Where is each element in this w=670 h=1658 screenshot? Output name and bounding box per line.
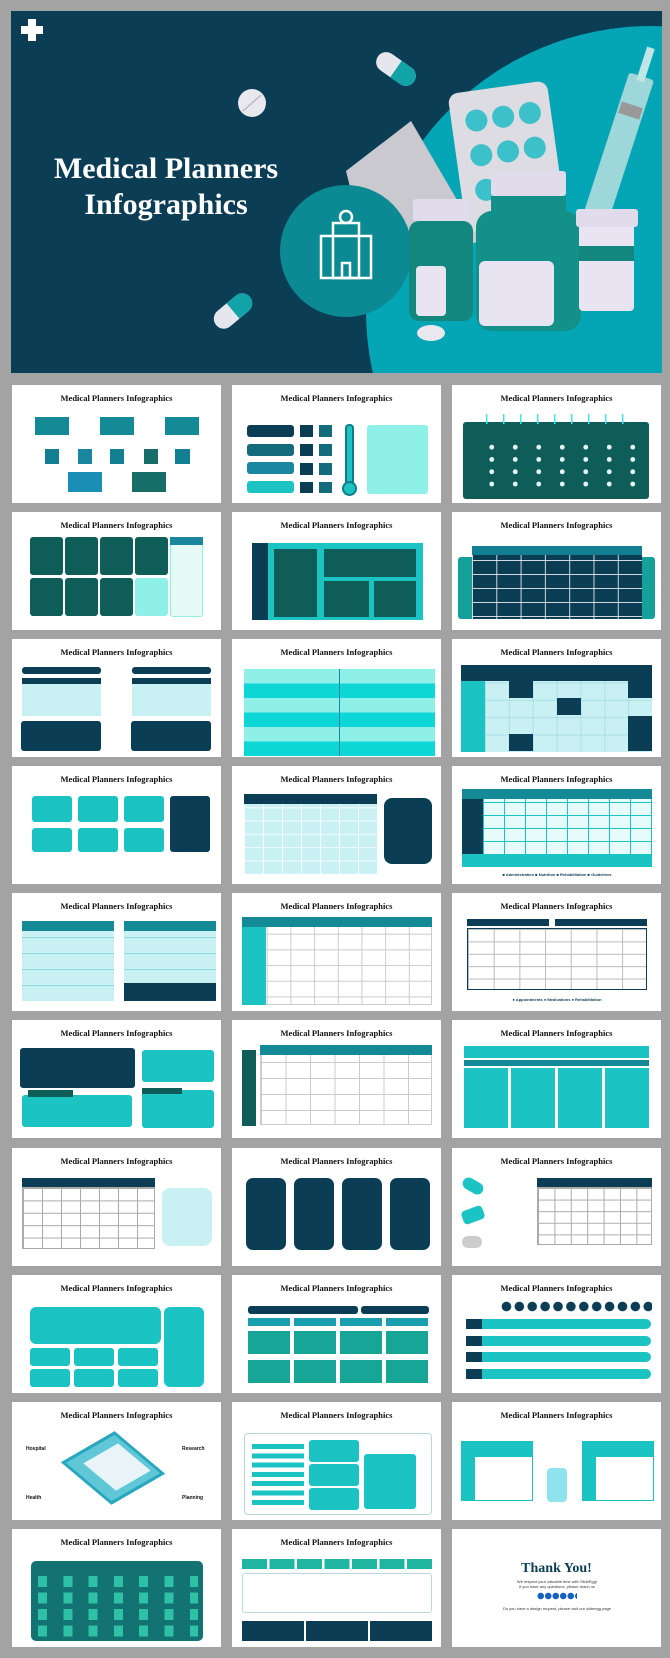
thumb 1: flow chart: Medical Planners Infographics	[61, 393, 172, 403]
thumb 11: calendar + dark note: Medical Planners Infographics	[281, 774, 392, 784]
thumb 13: treatment tables	[12, 893, 221, 1011]
thumb 25: clipboard: Planning	[182, 1495, 203, 1501]
thumb 12: weekly calendar: ■ Administration ■ Nutrition ■ Rehabilitation ■ Guidelines	[502, 872, 612, 877]
thumb 12: weekly calendar: Medical Planners Infographics	[501, 774, 612, 784]
thumb 13: treatment tables: Medical Planners Infographics	[61, 901, 172, 911]
thumb 30: thank you: Thank You!	[521, 1561, 592, 1576]
thumb 30: thank you: If you have any questions, please reach us	[519, 1584, 595, 1589]
thumb 2: thermometer	[232, 385, 441, 503]
thumb 20: four cards	[232, 1148, 441, 1266]
thumb 6: April calendar	[452, 512, 661, 630]
thumb 28: teal grid	[12, 1529, 221, 1647]
thumb 1: flow chart	[12, 385, 221, 503]
hero title: Infographics	[84, 188, 248, 221]
thumb 21: pills + June calendar	[452, 1148, 661, 1266]
thumb 9: schedule table	[452, 639, 661, 757]
thumb 7: two calendars: Medical Planners Infographics	[61, 647, 172, 657]
thumb 27: pills weekly planner	[452, 1402, 661, 1520]
thumb 25: clipboard: Hospital	[26, 1446, 46, 1452]
thumb 10: day cards	[12, 766, 221, 884]
thumb 15: two month calendars: ● Appointments ● Medications ● Rehabilitation	[512, 997, 602, 1002]
thumb 15: two month calendars	[452, 893, 661, 1011]
thumb 25: clipboard	[12, 1402, 221, 1520]
thumb 23: phases	[232, 1275, 441, 1393]
thumb 28: teal grid: Medical Planners Infographics	[61, 1537, 172, 1547]
thumb 9: schedule table: Medical Planners Infographics	[501, 647, 612, 657]
icon: plus	[21, 19, 43, 41]
thumb 16: patient form	[12, 1020, 221, 1138]
thumb 30: thank you	[452, 1529, 661, 1647]
thumb 10: day cards: Medical Planners Infographics	[61, 774, 172, 784]
thumb 29: daily planner: Medical Planners Infographics	[281, 1537, 392, 1547]
thumb 16: patient form: Medical Planners Infographics	[61, 1028, 172, 1038]
thumb 22: habit tracker: Medical Planners Infographics	[61, 1283, 172, 1293]
thumb 18: August weekly planner: Medical Planners Infographics	[501, 1028, 612, 1038]
thumb 12: weekly calendar	[452, 766, 661, 884]
thumb 26: to-do planner	[232, 1402, 441, 1520]
thumb 8: steps table: Medical Planners Infographics	[281, 647, 392, 657]
thumb 17: joint calendar	[232, 1020, 441, 1138]
thumb 4: weekly boxes: Medical Planners Infographics	[61, 520, 172, 530]
hero panel	[11, 11, 662, 373]
thumb 30: thank you: We respect your valuable time with SlideEgg!	[517, 1579, 597, 1584]
thumb 15: two month calendars: Medical Planners Infographics	[501, 901, 612, 911]
thumb 17: joint calendar: Medical Planners Infographics	[281, 1028, 392, 1038]
hero title: Medical Planners	[54, 152, 278, 185]
hero title	[54, 152, 278, 221]
thumb 22: habit tracker	[12, 1275, 221, 1393]
thumb 2: thermometer: Medical Planners Infographics	[281, 393, 392, 403]
thumb 25: clipboard: Health	[26, 1495, 41, 1501]
thumb 5: checklist: Medical Planners Infographics	[281, 520, 392, 530]
thumb 14: time table	[232, 893, 441, 1011]
thumb 11: calendar + dark note	[232, 766, 441, 884]
thumb 21: pills + June calendar: Medical Planners Infographics	[501, 1156, 612, 1166]
thumb 8: steps table	[232, 639, 441, 757]
thumb 23: phases: Medical Planners Infographics	[281, 1283, 392, 1293]
thumb 5: checklist	[232, 512, 441, 630]
thumb 24: week progress bars: Medical Planners Infographics	[501, 1283, 612, 1293]
thumb 19: May calendar: Medical Planners Infographics	[61, 1156, 172, 1166]
thumb 25: clipboard: Medical Planners Infographics	[61, 1410, 172, 1420]
thumb 30: thank you: Do you have a design request, please visit our slideegg page	[503, 1606, 611, 1611]
thumb 6: April calendar: Medical Planners Infographics	[501, 520, 612, 530]
thumb 14: time table: Medical Planners Infographics	[281, 901, 392, 911]
thumb 26: to-do planner: Medical Planners Infographics	[281, 1410, 392, 1420]
thumb 29: daily planner	[232, 1529, 441, 1647]
thumb 7: two calendars	[12, 639, 221, 757]
thumb 3: June calendar	[452, 385, 661, 503]
thumb 27: pills weekly planner: Medical Planners Infographics	[501, 1410, 612, 1420]
hero illustration	[214, 26, 662, 373]
thumb 18: August weekly planner	[452, 1020, 661, 1138]
thumb 3: June calendar: Medical Planners Infographics	[501, 393, 612, 403]
thumb 20: four cards: Medical Planners Infographics	[281, 1156, 392, 1166]
thumb 4: weekly boxes	[12, 512, 221, 630]
thumb 19: May calendar	[12, 1148, 221, 1266]
thumb 24: week progress bars	[452, 1275, 661, 1393]
thumb 25: clipboard: Research	[182, 1446, 205, 1452]
